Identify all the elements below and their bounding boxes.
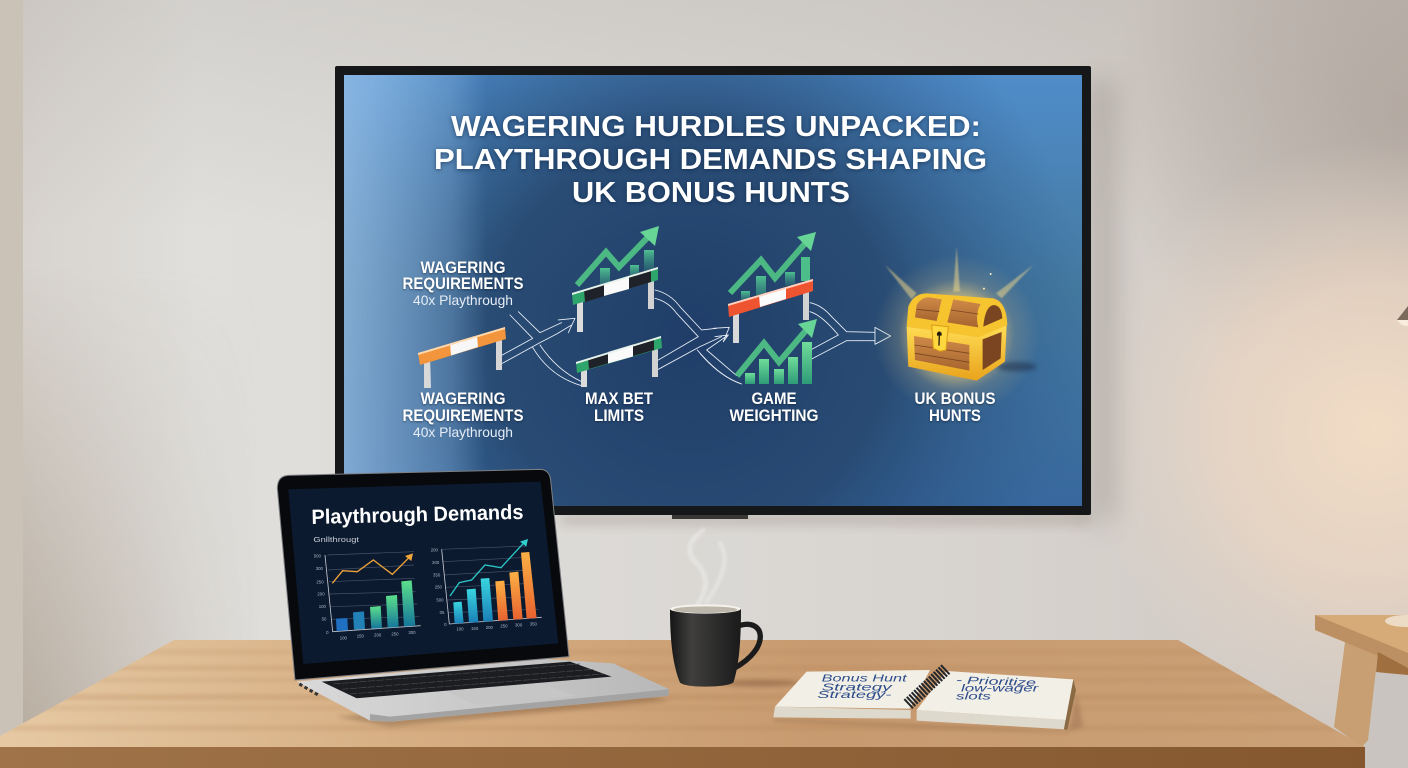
- left laptop chart: 250: [316, 579, 324, 584]
- laptop subtitle: Gnllthrougt: [313, 535, 359, 544]
- left laptop chart: 50: [322, 617, 327, 622]
- side table: [1315, 615, 1408, 747]
- handwritten notes left: [817, 673, 908, 701]
- chart icon: upper green arrow: [577, 226, 659, 290]
- right laptop chart: 100: [456, 627, 464, 632]
- handwritten notes right: slots: [956, 691, 991, 702]
- left laptop chart: 0: [326, 630, 329, 635]
- right laptop chart: 0: [444, 622, 447, 627]
- TV screen: [344, 75, 1082, 506]
- right laptop chart: 150: [471, 626, 479, 631]
- flow arrows: left section: [502, 290, 740, 386]
- title: UK BONUS HUNTS: [572, 177, 850, 209]
- lamp: [1397, 306, 1408, 326]
- notebook: [773, 669, 1083, 733]
- laptop screen: [288, 482, 558, 664]
- right laptop chart: 250: [435, 585, 443, 590]
- right laptop chart: 200: [486, 625, 494, 630]
- label: uk bonus hunts: HUNTS: [929, 407, 981, 425]
- label: uk bonus hunts: [914, 390, 996, 425]
- laptop title: Playthrough Demands: [311, 501, 524, 529]
- left laptop chart: 300: [408, 630, 416, 635]
- coffee mug: [670, 604, 800, 687]
- title: WAGERING HURDLES UNPACKED:: [451, 111, 981, 143]
- title: [434, 111, 987, 209]
- label: wagering requirements upper: REQUIREMENTS: [402, 275, 524, 293]
- left laptop chart: 250: [391, 631, 399, 636]
- hurdle: red game weighting: [728, 279, 813, 343]
- left laptop chart: 200: [317, 591, 325, 596]
- laptop base: [297, 659, 669, 722]
- label: wagering requirements upper: WAGERING: [420, 259, 506, 277]
- steam: [690, 530, 724, 603]
- chart icon: game weighting upper: [730, 232, 816, 306]
- right laptop chart: 300: [432, 560, 440, 565]
- label: wagering requirements lower: 40x Playthrough: [413, 424, 513, 440]
- left laptop chart: 100: [340, 635, 348, 640]
- right laptop chart: [431, 539, 542, 632]
- label: wagering requirements lower: REQUIREMENTS: [402, 407, 524, 425]
- left laptop chart: 200: [374, 633, 382, 638]
- treasure chest: [873, 247, 1040, 415]
- laptop lid: [277, 469, 569, 680]
- handwritten notes left: Bonus Hunt: [822, 673, 908, 684]
- label: wagering requirements upper: 40x Playthrough: [413, 292, 513, 308]
- handwritten notes right: [956, 675, 1039, 702]
- chart icon: game weighting lower: [737, 319, 817, 384]
- label: game weighting: WEIGHTING: [730, 407, 818, 425]
- spiral binding: [907, 669, 946, 705]
- desk: [0, 640, 1365, 768]
- left laptop chart: 150: [357, 633, 365, 638]
- right laptop chart: 350: [433, 573, 441, 578]
- left laptop chart: 300: [316, 566, 324, 571]
- right laptop chart: 500: [436, 598, 444, 603]
- left laptop chart: 500: [314, 553, 322, 558]
- handwritten notes right: - Prioritize: [956, 675, 1037, 689]
- right laptop chart: 250: [500, 624, 508, 629]
- label: game weighting: GAME: [752, 390, 796, 408]
- label: wagering requirements lower: WAGERING: [420, 390, 506, 408]
- handwritten notes left: Strategy: [822, 683, 893, 694]
- label: max bet limits: [585, 390, 653, 425]
- hurdle: black green upper: [572, 267, 658, 332]
- right laptop chart: 05: [440, 610, 445, 615]
- left laptop chart: 100: [319, 604, 327, 609]
- laptop: [277, 469, 670, 727]
- label: max bet limits: LIMITS: [594, 407, 644, 425]
- hurdle: orange wagering requirements: [418, 327, 506, 388]
- label: wagering requirements upper: [402, 259, 524, 308]
- label: wagering requirements lower: [402, 390, 524, 440]
- TV: [335, 66, 1091, 519]
- label: game weighting: [730, 390, 818, 425]
- title: PLAYTHROUGH DEMANDS SHAPING: [434, 144, 987, 176]
- label: uk bonus hunts: UK BONUS: [914, 390, 996, 408]
- label: max bet limits: MAX BET: [585, 390, 653, 408]
- handwritten notes left: Strategy-: [817, 690, 892, 701]
- handwritten notes right: low-wager: [961, 683, 1039, 694]
- right laptop chart: 200: [431, 548, 439, 553]
- left laptop chart: [314, 552, 421, 640]
- right laptop chart: 300: [515, 622, 523, 627]
- flow arrows: right section: [700, 303, 891, 384]
- hurdle: black green lower: [576, 336, 662, 387]
- right laptop chart: 350: [530, 621, 538, 626]
